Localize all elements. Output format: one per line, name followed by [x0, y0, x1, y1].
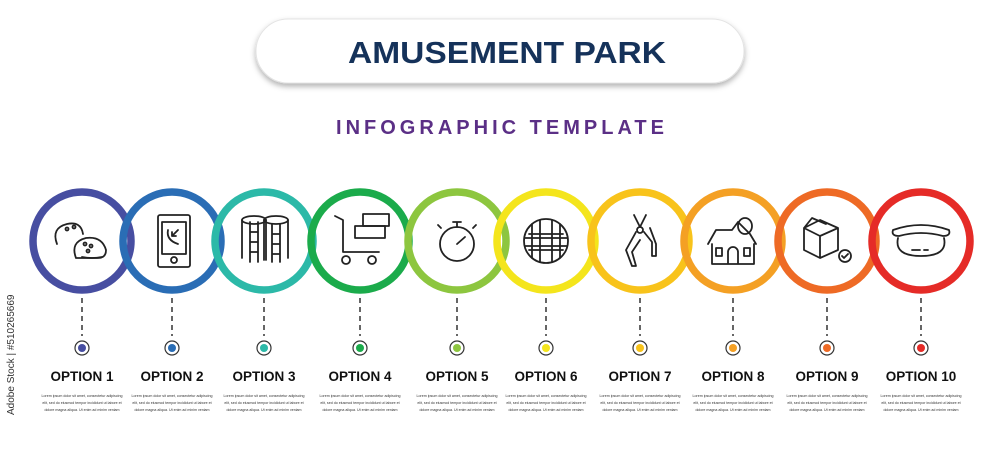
option labels: OPTION 7 — [608, 369, 672, 384]
option labels: OPTION 6 — [514, 369, 578, 384]
description texts: Lorem ipsum dolor sit amet, consectetur adipiscing — [600, 394, 680, 398]
description texts: dolore magna aliqua. Ut enim ad minim veniam — [44, 408, 120, 412]
icon: silos — [242, 216, 288, 262]
description texts — [42, 394, 961, 412]
description texts: Lorem ipsum dolor sit amet, consectetur adipiscing — [787, 394, 867, 398]
description texts: dolore magna aliqua. Ut enim ad minim veniam — [134, 408, 210, 412]
icon: pliers — [626, 215, 656, 266]
dashed connectors — [82, 298, 921, 336]
description texts: elit, sed do eiusmod tempor incididunt ut labore et — [787, 401, 867, 405]
description texts: elit, sed do eiusmod tempor incididunt ut labore et — [224, 401, 304, 405]
option labels: OPTION 3 — [232, 369, 296, 384]
ring chain — [33, 192, 970, 290]
description texts: dolore magna aliqua. Ut enim ad minim veniam — [322, 408, 398, 412]
option labels: OPTION 8 — [701, 369, 765, 384]
icons — [55, 214, 949, 267]
description texts: elit, sed do eiusmod tempor incididunt ut labore et — [132, 401, 212, 405]
description texts: Lorem ipsum dolor sit amet, consectetur adipiscing — [693, 394, 773, 398]
icon: phone — [158, 215, 190, 267]
description texts: elit, sed do eiusmod tempor incididunt ut labore et — [417, 401, 497, 405]
title pill — [256, 19, 744, 83]
description texts: Lorem ipsum dolor sit amet, consectetur adipiscing — [881, 394, 961, 398]
icon: waffle — [524, 219, 568, 263]
option labels: OPTION 1 — [50, 369, 114, 384]
description texts: dolore magna aliqua. Ut enim ad minim veniam — [789, 408, 865, 412]
description texts: dolore magna aliqua. Ut enim ad minim veniam — [695, 408, 771, 412]
description texts: dolore magna aliqua. Ut enim ad minim veniam — [419, 408, 495, 412]
dots — [75, 341, 928, 355]
description texts: elit, sed do eiusmod tempor incididunt ut labore et — [881, 401, 961, 405]
description texts: Lorem ipsum dolor sit amet, consectetur adipiscing — [320, 394, 400, 398]
description texts: elit, sed do eiusmod tempor incididunt ut labore et — [693, 401, 773, 405]
option labels — [50, 369, 956, 384]
option labels: OPTION 2 — [140, 369, 204, 384]
description texts: dolore magna aliqua. Ut enim ad minim veniam — [508, 408, 584, 412]
description texts: elit, sed do eiusmod tempor incididunt ut labore et — [600, 401, 680, 405]
description texts: elit, sed do eiusmod tempor incididunt ut labore et — [506, 401, 586, 405]
icon: cart — [335, 214, 389, 264]
description texts: elit, sed do eiusmod tempor incididunt ut labore et — [320, 401, 400, 405]
description texts: Lorem ipsum dolor sit amet, consectetur adipiscing — [506, 394, 586, 398]
description texts: dolore magna aliqua. Ut enim ad minim veniam — [602, 408, 678, 412]
icon: haunted house — [708, 218, 756, 264]
description texts: elit, sed do eiusmod tempor incididunt ut labore et — [42, 401, 122, 405]
description texts: Lorem ipsum dolor sit amet, consectetur adipiscing — [132, 394, 212, 398]
option labels: OPTION 10 — [886, 369, 956, 384]
subtitle: INFOGRAPHIC TEMPLATE — [336, 117, 664, 139]
description texts: dolore magna aliqua. Ut enim ad minim veniam — [226, 408, 302, 412]
icon: hotdog — [893, 225, 949, 256]
description texts: Lorem ipsum dolor sit amet, consectetur adipiscing — [42, 394, 122, 398]
option labels: OPTION 5 — [425, 369, 489, 384]
description texts: dolore magna aliqua. Ut enim ad minim veniam — [883, 408, 959, 412]
description texts: Lorem ipsum dolor sit amet, consectetur adipiscing — [417, 394, 497, 398]
icon: box check — [804, 218, 851, 262]
icon: stopwatch — [438, 222, 476, 261]
option labels: OPTION 9 — [795, 369, 859, 384]
title pill: AMUSEMENT PARK — [348, 35, 667, 70]
icon: buns — [55, 223, 106, 258]
side watermark id: Adobe Stock | #510265669 — [6, 294, 17, 415]
option labels: OPTION 4 — [328, 369, 392, 384]
description texts: Lorem ipsum dolor sit amet, consectetur adipiscing — [224, 394, 304, 398]
